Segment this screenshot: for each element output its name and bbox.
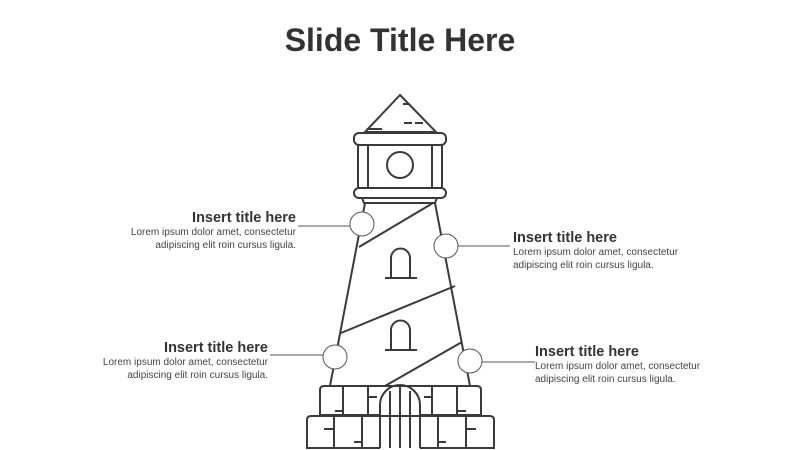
callout: bottom left: Lorem ipsum dolor amet, consectetur <box>103 357 268 368</box>
tower <box>330 203 470 386</box>
callout: top left: Insert title here <box>192 210 296 226</box>
callout: top left <box>131 210 296 251</box>
roof <box>365 95 436 132</box>
callout: top left: adipiscing elit roin cursus ligula. <box>155 240 296 251</box>
callout: bottom right: Insert title here <box>535 344 639 360</box>
connector markers <box>270 212 535 373</box>
callout: bottom right <box>535 344 700 385</box>
callout: top right: Lorem ipsum dolor amet, consectetur <box>513 247 678 258</box>
callout: bottom right: adipiscing elit roin cursus ligula. <box>535 374 676 385</box>
callout: bottom left <box>103 340 268 381</box>
title: Slide Title Here <box>285 22 515 58</box>
callout: bottom left: Insert title here <box>164 340 268 356</box>
callout: bottom right: Lorem ipsum dolor amet, consectetur <box>535 361 700 372</box>
callout: top right: Insert title here <box>513 230 617 246</box>
lantern <box>354 133 446 203</box>
callout: top right <box>513 230 678 271</box>
callout: top left: Lorem ipsum dolor amet, consectetur <box>131 227 296 238</box>
callout: top right: adipiscing elit roin cursus ligula. <box>513 260 654 271</box>
base <box>307 385 494 448</box>
callout: bottom left: adipiscing elit roin cursus ligula. <box>127 370 268 381</box>
